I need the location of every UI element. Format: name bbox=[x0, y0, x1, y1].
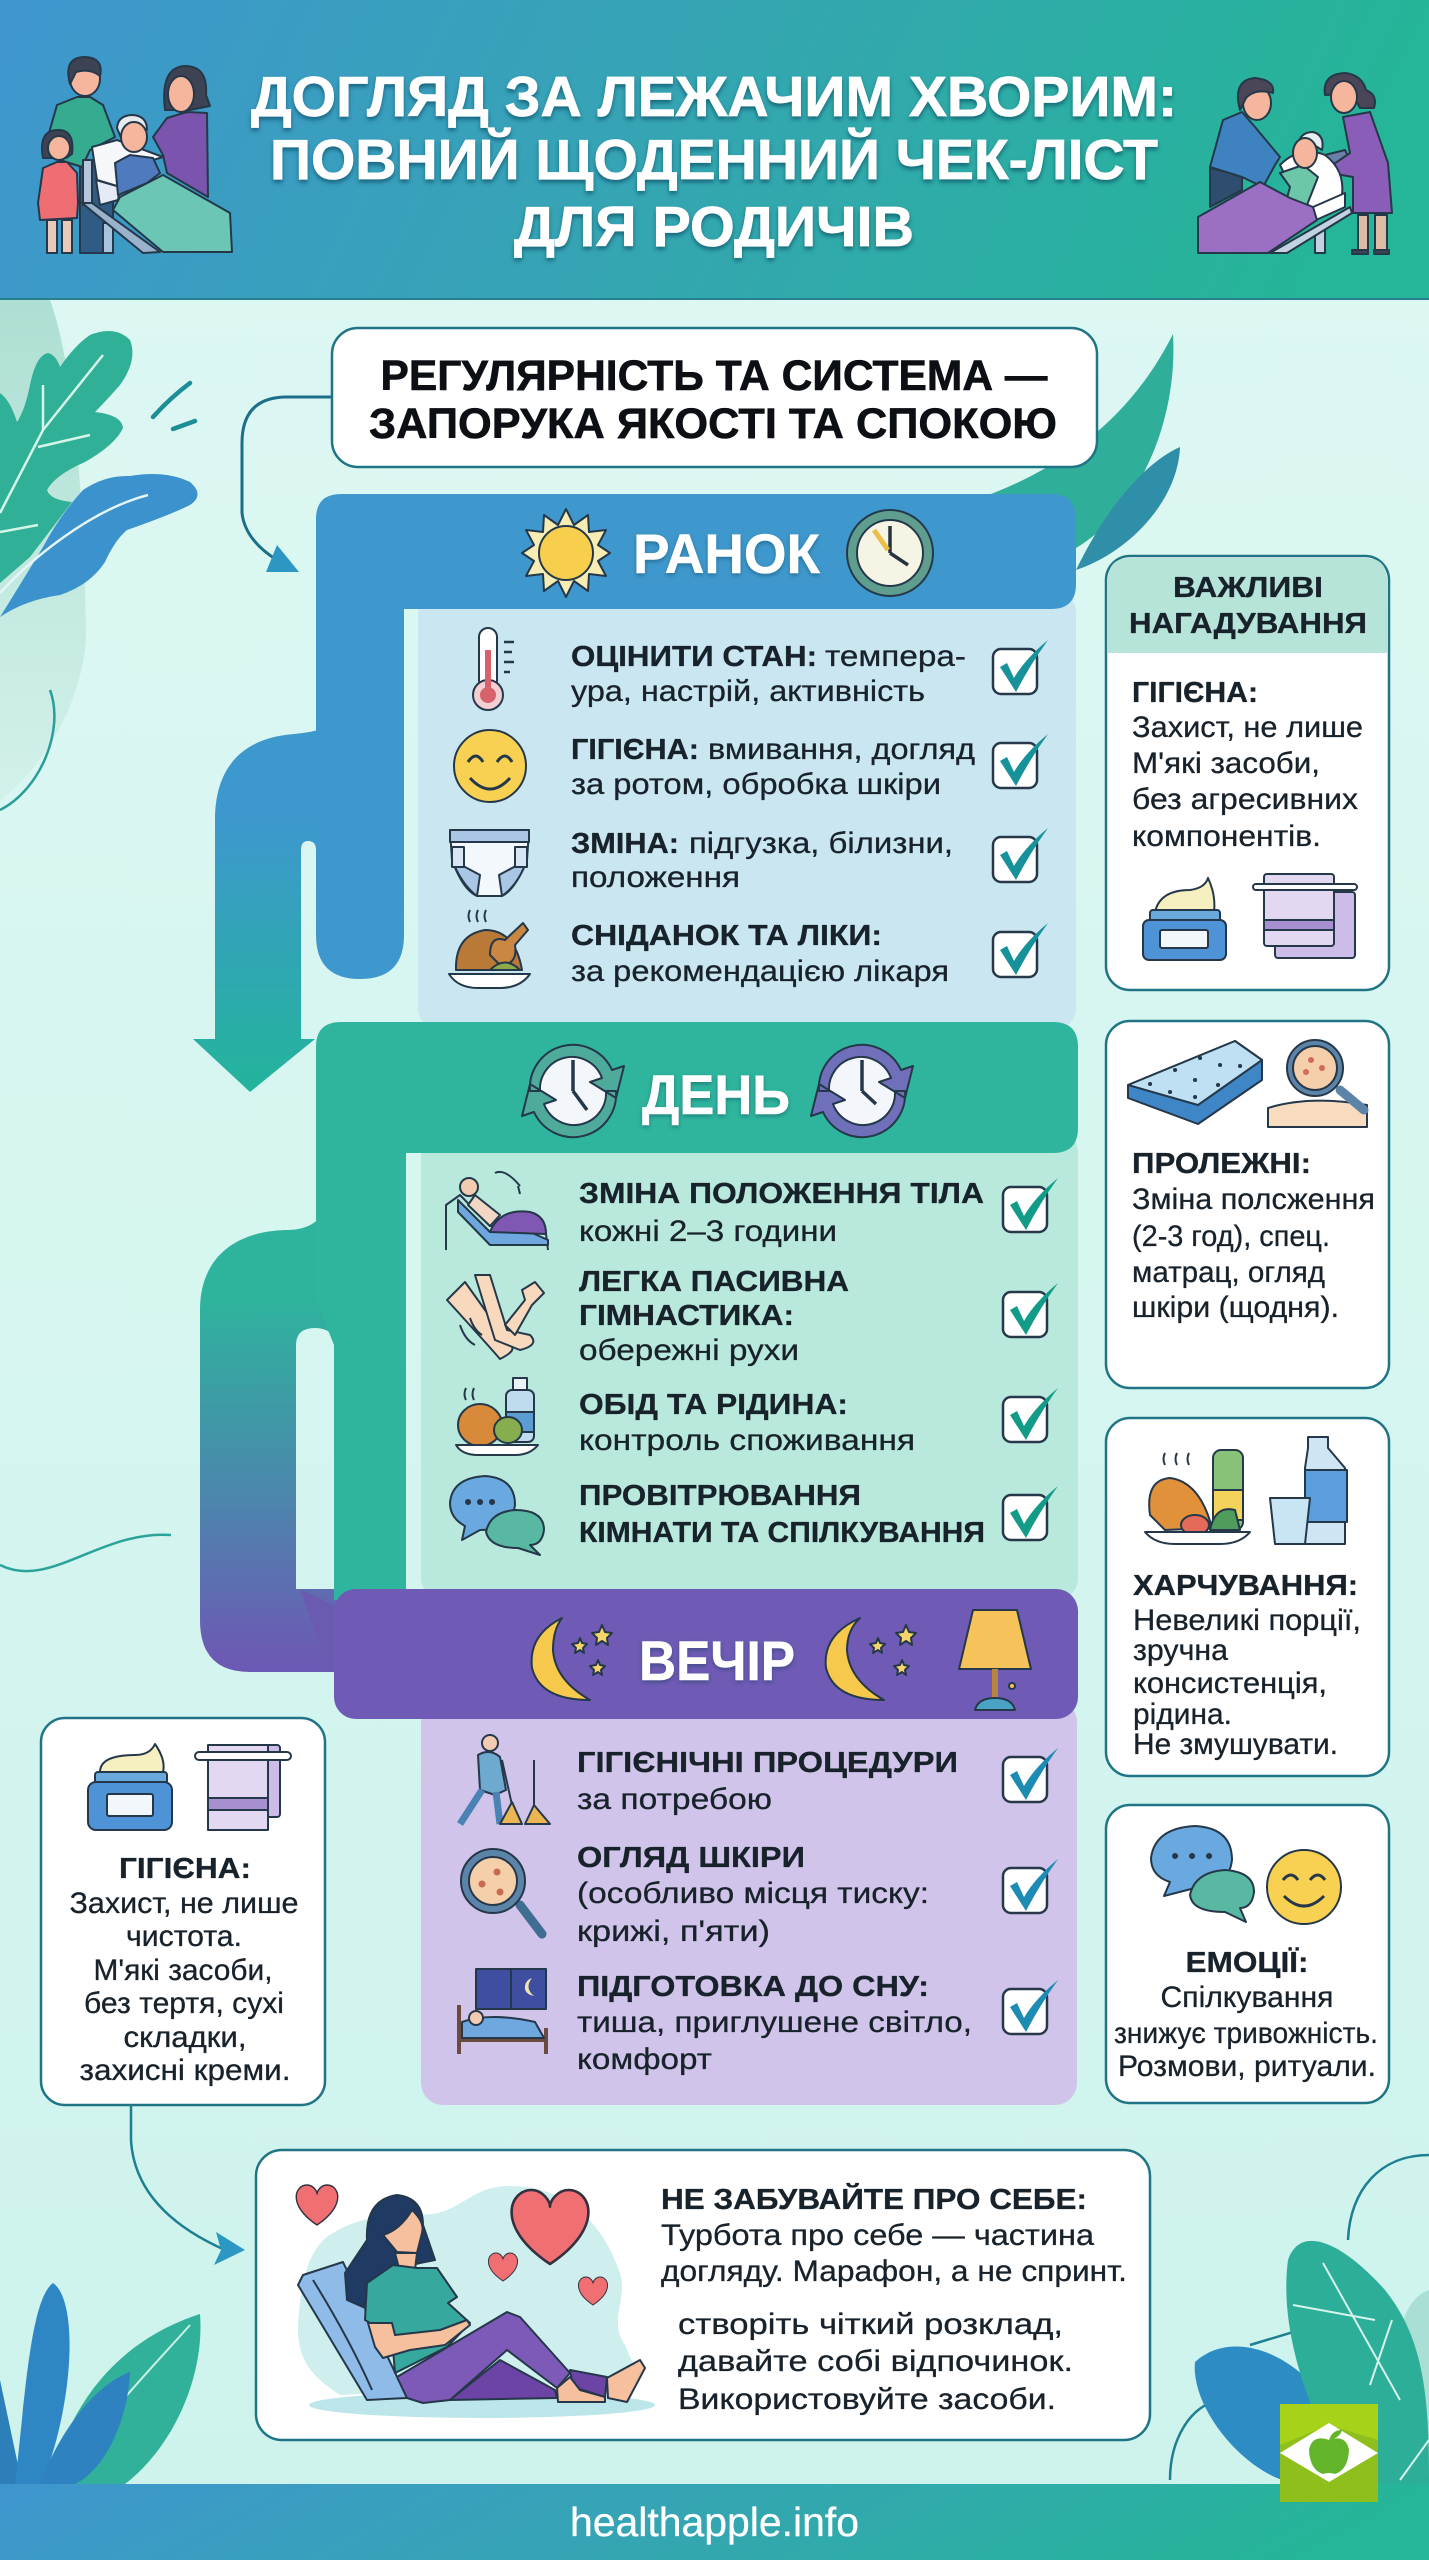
morning checkboxes bbox=[993, 640, 1048, 977]
card: hygiene left: складки, bbox=[124, 2021, 246, 2054]
morning heading: РАНОК bbox=[633, 522, 821, 585]
icon: lamp bbox=[959, 1610, 1031, 1710]
card: emotions: Спілкування bbox=[1160, 1981, 1334, 2014]
icon: limbs bbox=[447, 1275, 544, 1359]
icon: food plate bbox=[1145, 1450, 1250, 1544]
subtitle box: РЕГУЛЯРНІСТЬ ТА СИСТЕМА — bbox=[380, 352, 1048, 400]
card: nutrition: консистенція, bbox=[1133, 1667, 1327, 1700]
logo: green apple bbox=[1280, 2404, 1378, 2502]
card: important reminders, hygiene: НАГАДУВАННЯ bbox=[1129, 608, 1367, 640]
subtitle box: ЗАПОРУКА ЯКОСТІ ТА СПОКОЮ bbox=[369, 400, 1057, 448]
morning item: breakfast bbox=[449, 910, 949, 988]
evening heading: ВЕЧІР bbox=[639, 1629, 795, 1692]
icon: person on bed bbox=[446, 1172, 548, 1250]
day item: gymnastics: ЛЕГКА ПАСИВНА bbox=[579, 1266, 849, 1298]
panel: evening bbox=[300, 1589, 1078, 2105]
card: self-care: НЕ ЗАБУВАЙТЕ ПРО СЕБЕ: bbox=[661, 2182, 1087, 2216]
evening item: hygiene procedures bbox=[460, 1735, 958, 1824]
evening item: hygiene procedures: ГІГІЄНІЧНІ ПРОЦЕДУРИ bbox=[577, 1747, 958, 1779]
decorative leaves: bottom right bbox=[1170, 2155, 1429, 2484]
day header band bbox=[316, 1022, 1078, 1600]
day item: body position: ЗМІНА ПОЛОЖЕННЯ ТІЛА bbox=[579, 1178, 984, 1210]
icon: clock with purple arrows bbox=[811, 1045, 913, 1137]
icon: water bbox=[1270, 1437, 1347, 1544]
card: hygiene left: Захист, не лише bbox=[70, 1887, 298, 1920]
card: bedsores bbox=[1106, 1021, 1389, 1388]
icon: caregiver with broom bbox=[460, 1735, 550, 1824]
morning item: change: ЗМІНА: bbox=[571, 828, 679, 860]
icon: chat bubbles bbox=[450, 1476, 544, 1555]
card: emotions: Розмови, ритуали. bbox=[1118, 2050, 1376, 2083]
day checkboxes bbox=[1003, 1178, 1058, 1540]
card: emotions: знижує тривожність. bbox=[1114, 2017, 1378, 2050]
card: hygiene left: М'які засоби, bbox=[94, 1954, 272, 1987]
day item: ventilation and communication bbox=[450, 1476, 985, 1555]
card: nutrition: Невеликі порції, bbox=[1133, 1604, 1361, 1637]
card: self-care: Використовуйте засоби. bbox=[678, 2383, 1056, 2416]
icon: moon and stars bbox=[532, 1618, 612, 1700]
card: important reminders, hygiene: Захист, не лише bbox=[1132, 711, 1363, 744]
card: bedsores: ПРОЛЕЖНІ: bbox=[1132, 1148, 1311, 1180]
card: nutrition: рідина. bbox=[1133, 1698, 1232, 1731]
decorative leaves: bottom left bbox=[0, 2283, 200, 2484]
card: self-care: догляду. Марафон, а не спринт. bbox=[661, 2255, 1127, 2288]
morning item: hygiene: ГІГІЄНА: bbox=[571, 734, 699, 766]
day item: gymnastics: ГІМНАСТИКА: bbox=[579, 1300, 794, 1332]
footer band bbox=[0, 2484, 1429, 2560]
icon: roast chicken bbox=[449, 910, 530, 988]
card: important reminders, hygiene bbox=[1106, 556, 1389, 990]
icon: bed and night window bbox=[459, 1969, 546, 2054]
panel: day bbox=[200, 1022, 1078, 1672]
icon: chat bubbles bbox=[1151, 1826, 1254, 1922]
evening item: skin check: (особливо місця тиску: bbox=[577, 1877, 929, 1910]
day item: ventilation and communication: КІМНАТИ ТА СПІЛКУВАННЯ bbox=[579, 1517, 985, 1549]
day item: lunch and liquid bbox=[456, 1378, 915, 1457]
title: ДЛЯ РОДИЧІВ bbox=[514, 195, 914, 259]
evening item: hygiene procedures: за потребою bbox=[577, 1783, 772, 1816]
decorative leaves: top left bbox=[0, 300, 198, 1571]
title bbox=[251, 65, 1177, 259]
card: nutrition: ХАРЧУВАННЯ: bbox=[1133, 1570, 1358, 1602]
day arrow branch bbox=[200, 1205, 345, 1672]
morning item: hygiene: вмивання, догляд bbox=[708, 733, 975, 766]
subtitle box bbox=[332, 328, 1097, 467]
icon: caregivers and patient bbox=[1198, 73, 1392, 254]
icon: cream jar bbox=[88, 1744, 172, 1830]
evening item: sleep preparation: тиша, приглушене світло, bbox=[577, 2006, 972, 2039]
evening item: skin check: крижі, п'яти) bbox=[577, 1915, 770, 1948]
icon: magnifier bbox=[461, 1849, 542, 1934]
morning item: hygiene bbox=[454, 730, 975, 802]
day item: body position: кожні 2–3 години bbox=[579, 1215, 837, 1248]
card: important reminders, hygiene: ВАЖЛИВІ bbox=[1173, 572, 1323, 604]
morning header band bbox=[316, 494, 1076, 979]
panel: morning bbox=[193, 494, 1076, 1092]
title: ПОВНИЙ ЩОДЕННИЙ ЧЕК-ЛІСТ bbox=[270, 127, 1158, 192]
evening item: sleep preparation bbox=[459, 1969, 972, 2076]
card: self-care: створіть чіткий розклад, bbox=[678, 2308, 1063, 2341]
morning item: breakfast: СНІДАНОК ТА ЛІКИ: bbox=[571, 920, 882, 952]
card: bedsores: (2-3 год), спец. bbox=[1132, 1220, 1330, 1253]
day item: body position bbox=[446, 1172, 984, 1250]
icon: magnifier over skin bbox=[1268, 1040, 1367, 1127]
icon: morning clock bbox=[847, 510, 933, 596]
evening item: skin check: ОГЛЯД ШКІРИ bbox=[577, 1842, 805, 1874]
decorative leaves: behind subtitle bbox=[975, 334, 1180, 570]
morning item: assess condition: ОЦІНИТИ СТАН: bbox=[571, 641, 817, 673]
card: nutrition: Не змушувати. bbox=[1133, 1728, 1338, 1761]
icon: towel bbox=[195, 1745, 291, 1830]
icon: towel bbox=[1253, 874, 1357, 958]
morning item: change: підгузка, білизни, bbox=[689, 827, 953, 860]
icon: cream jar bbox=[1143, 878, 1226, 960]
card: emotions: ЕМОЦІЇ: bbox=[1186, 1946, 1308, 1979]
card: bedsores: шкіри (щодня). bbox=[1132, 1291, 1339, 1324]
day item: gymnastics: обережні рухи bbox=[579, 1334, 799, 1367]
card: hygiene left: без тертя, сухі bbox=[84, 1987, 284, 2020]
card: hygiene left: ГІГІЄНА: bbox=[119, 1853, 251, 1885]
icon: clock with teal arrows bbox=[522, 1045, 624, 1137]
evening item: skin check bbox=[461, 1842, 929, 1948]
day heading: ДЕНЬ bbox=[642, 1063, 790, 1126]
icon: moon and stars bbox=[826, 1618, 916, 1700]
card: emotions bbox=[1106, 1805, 1389, 2103]
day checklist background bbox=[421, 1130, 1078, 1600]
icon: family around the bed bbox=[38, 57, 232, 253]
connector arrow: subtitle to morning bbox=[242, 397, 332, 572]
evening item: sleep preparation: ПІДГОТОВКА ДО СНУ: bbox=[577, 1971, 929, 2003]
card: important reminders, hygiene: без агресивних bbox=[1132, 783, 1358, 816]
morning item: hygiene: за ротом, обробка шкіри bbox=[571, 768, 941, 801]
day item: gymnastics bbox=[447, 1266, 849, 1367]
icon: mattress bbox=[1128, 1041, 1262, 1124]
evening arrow tip bbox=[300, 1589, 382, 1672]
icon: sun bbox=[522, 509, 610, 597]
illustration: resting woman with hearts bbox=[296, 2185, 655, 2418]
card: bedsores: матрац, огляд bbox=[1132, 1256, 1325, 1289]
header band bbox=[0, 0, 1429, 300]
morning checklist background bbox=[418, 590, 1076, 1030]
evening item: sleep preparation: комфорт bbox=[577, 2043, 712, 2076]
icon: plate and bottle bbox=[456, 1378, 538, 1455]
card: important reminders, hygiene: компонентів. bbox=[1132, 820, 1321, 853]
evening checklist background bbox=[421, 1700, 1077, 2105]
icon: smile bbox=[1267, 1850, 1341, 1924]
morning arrow branch bbox=[193, 725, 330, 1092]
morning item: assess condition: темпера- bbox=[825, 640, 966, 673]
card: self-care: Турбота про себе — частина bbox=[661, 2219, 1094, 2252]
card: hygiene left bbox=[41, 1718, 325, 2105]
icon: smile bbox=[454, 730, 526, 802]
morning item: assess condition bbox=[473, 628, 966, 710]
card: self-care: давайте собі відпочинок. bbox=[678, 2345, 1073, 2378]
morning item: change: положення bbox=[571, 861, 740, 894]
day item: lunch and liquid: ОБІД ТА РІДИНА: bbox=[579, 1389, 848, 1421]
evening checkboxes bbox=[1003, 1748, 1058, 2034]
title: ДОГЛЯД ЗА ЛЕЖАЧИМ ХВОРИМ: bbox=[251, 65, 1177, 129]
connector arrow: hygiene to self-care bbox=[131, 2105, 245, 2265]
card: important reminders, hygiene: ГІГІЄНА: bbox=[1132, 677, 1258, 709]
card: nutrition bbox=[1106, 1418, 1389, 1776]
card: self-care bbox=[256, 2150, 1150, 2440]
footer url: healthapple.info bbox=[570, 2499, 859, 2545]
morning item: assess condition: ура, настрій, активність bbox=[571, 675, 925, 708]
icon: thermometer bbox=[473, 628, 514, 710]
icon: diaper bbox=[450, 830, 529, 896]
day item: ventilation and communication: ПРОВІТРЮВАННЯ bbox=[579, 1480, 861, 1512]
card: hygiene left: чистота. bbox=[126, 1920, 242, 1953]
card: bedsores: Зміна полсження bbox=[1132, 1183, 1375, 1216]
card: nutrition: зручна bbox=[1133, 1634, 1228, 1667]
card: important reminders, hygiene: М'які засоби, bbox=[1132, 747, 1320, 780]
evening header band bbox=[334, 1589, 1078, 1719]
card header bbox=[1108, 558, 1387, 653]
card: hygiene left: захисні креми. bbox=[80, 2054, 290, 2087]
morning item: breakfast: за рекомендацією лікаря bbox=[571, 955, 949, 988]
morning item: change bbox=[450, 827, 953, 896]
day item: lunch and liquid: контроль споживання bbox=[579, 1424, 915, 1457]
